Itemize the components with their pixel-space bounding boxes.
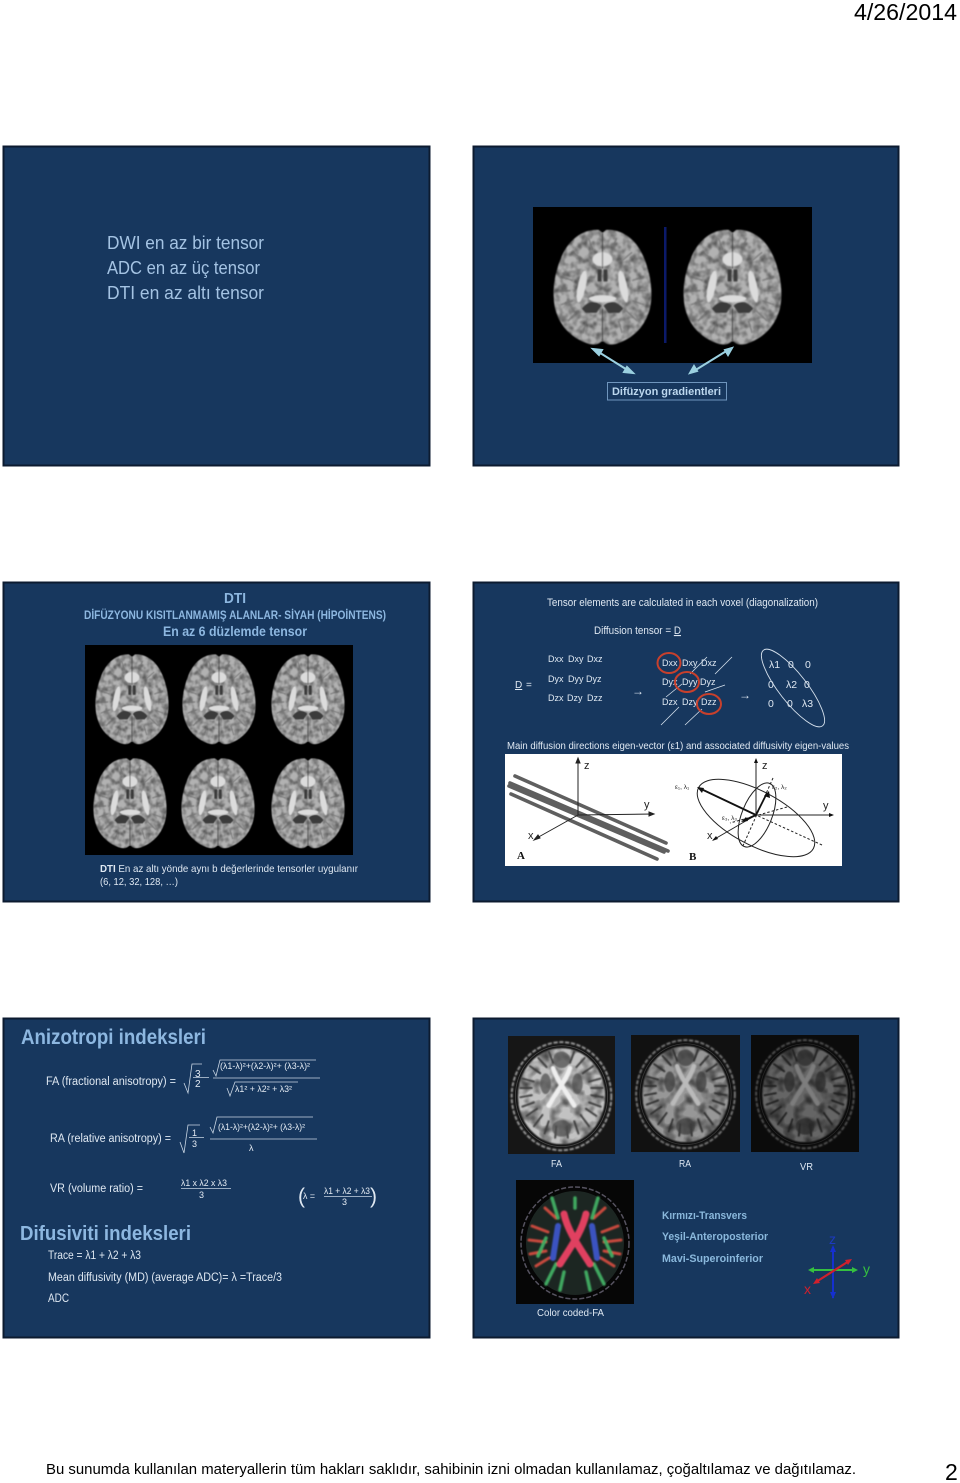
matrix: D: Dxy: [568, 654, 584, 664]
heading: diffusivity: Difusiviti indeksleri: [20, 1223, 191, 1245]
matrix: D: Dzy: [567, 693, 583, 703]
diagram B: ε₃, λ₃: [722, 815, 737, 822]
diagram B: B: [689, 851, 697, 863]
legend: direction colors: Kırmızı-Transvers: [662, 1210, 747, 1222]
caption: (6, 12, 32, 128, …): [100, 876, 178, 888]
legend: direction colors: Yeşil-Anteroposterior: [662, 1231, 769, 1243]
panel: slide 2 diffusion gradients: [474, 146, 898, 466]
formula: VR: 3: [199, 1190, 204, 1200]
caption: eigen vectors: Main diffusion directions eigen-vector (ε1) and associated diffusivity eigen-values: [507, 741, 849, 752]
label: diffusion gradients: Difüzyon gradientleri: [612, 386, 721, 398]
brain image grid: [85, 645, 353, 855]
formula: mean lambda: 3: [342, 1197, 347, 1207]
formula: FA: 2: [195, 1079, 201, 1090]
heading: DTI: [84, 590, 386, 639]
matrix: diagonal eigenvalues: [752, 642, 834, 734]
matrix: D: Dxx: [548, 654, 564, 664]
icon: axes: z: [829, 1231, 836, 1247]
icon: axes: [804, 1231, 870, 1299]
formula: RA: 3: [192, 1139, 197, 1149]
formula: VR: [50, 1178, 231, 1200]
formula: FA: 3: [195, 1069, 201, 1080]
diagram A: x: [528, 830, 534, 842]
text block: tensor counts: ADC en az üç tensor: [107, 258, 260, 278]
formula: VR: λ1 x λ2 x λ3: [181, 1178, 227, 1188]
matrix: D: Dxz: [587, 654, 603, 664]
matrix: diagonal eigenvalues: 0: [788, 659, 794, 671]
matrix: D: Dyy: [568, 674, 584, 684]
arrow: left gradient: [593, 349, 633, 373]
diagram A: [509, 758, 668, 862]
matrix: D: Dzz: [587, 693, 603, 703]
text block: diffusivity indices: [48, 1250, 282, 1305]
matrix: diagonal eigenvalues: λ1: [769, 659, 780, 671]
formula: mean lambda: λ =: [303, 1191, 315, 1201]
panel: slide 3 DTI: [4, 582, 430, 902]
diagram B: y: [823, 800, 829, 812]
text block: tensor counts: DWI en az bir tensor: [107, 233, 264, 253]
image: VR map: [751, 1035, 859, 1152]
matrix: D: Dyx: [548, 674, 564, 684]
map labels: [551, 1159, 813, 1173]
formula: mean lambda: (: [298, 1185, 305, 1208]
legend: direction colors: [662, 1210, 769, 1265]
matrix: crossed off-diagonal: Dxx: [662, 658, 678, 668]
matrix: diagonal eigenvalues: 0: [804, 679, 810, 691]
formula: FA: λ1² + λ2² + λ3²: [235, 1084, 292, 1094]
diagram A: y: [644, 799, 650, 811]
image: FA map: [508, 1036, 615, 1154]
matrix: crossed off-diagonal: Dzx: [662, 697, 678, 707]
diagram B: x: [707, 830, 713, 842]
matrix: D: [515, 654, 603, 703]
arrow: to diagonal matrix: →: [739, 688, 751, 702]
matrix: crossed off-diagonal: Dyy: [682, 677, 698, 687]
diagram B: ε₂, λ₂: [772, 784, 787, 791]
image: RA map: [631, 1035, 740, 1152]
matrix: crossed off-diagonal: Dzz: [701, 697, 717, 707]
map labels: VR: [800, 1162, 813, 1173]
formula: VR: VR (volume ratio) =: [50, 1183, 143, 1195]
formula: RA: λ: [249, 1143, 254, 1153]
diagram B: [675, 758, 834, 872]
panel: slide 4 tensor elements: [474, 582, 898, 902]
diagram A: z: [584, 760, 590, 772]
heading: DTI: DTI: [224, 590, 246, 607]
matrix: D: Dzx: [548, 693, 564, 703]
caption: [100, 863, 358, 888]
matrix: diagonal eigenvalues: 0: [768, 679, 774, 691]
matrix: D: Dyz: [586, 674, 602, 684]
formula: RA: 1: [192, 1128, 197, 1138]
heading: DTI: En az 6 düzlemde tensor: [163, 624, 308, 639]
footer note: Bu sunumda kullanılan materyallerin tüm hakları saklıdır, sahibinin izni olmadan kullanılamaz, çoğaltılamaz ve dağıtılamaz.: [46, 1461, 856, 1478]
matrix: crossed off-diagonal: Dxz: [701, 658, 717, 668]
brain images pair: [533, 207, 812, 363]
map labels: FA: [551, 1159, 562, 1170]
matrix: diagonal eigenvalues: λ3: [802, 698, 813, 710]
formula: FA: FA (fractional anisotropy) =: [46, 1076, 176, 1088]
label: color coded FA: Color coded-FA: [537, 1308, 604, 1319]
panel: slide 6 FA maps: [474, 1018, 898, 1338]
heading: DTI: DİFÜZYONU KISITLANMAMIŞ ALANLAR- SİYAH (HİPOİNTENS): [84, 607, 386, 622]
icon: axes: x: [804, 1281, 811, 1297]
heading text: Tensor elements are calculated in each voxel (diagonalization): [547, 597, 818, 609]
icon: axes: y: [863, 1261, 870, 1277]
formula: RA: [50, 1117, 317, 1153]
matrix: diagonal eigenvalues: 0: [768, 698, 774, 710]
text block: tensor counts: DTI en az altı tensor: [107, 283, 264, 303]
caption: DTI En az altı yönde aynı b değerlerinde tensorler uygulanır: [100, 863, 358, 875]
panel: slide 1 tensor counts: [4, 146, 430, 466]
formula: FA: [46, 1060, 320, 1096]
text block: diffusivity indices: Trace = λ1 + λ2 + λ3: [48, 1250, 141, 1262]
arrow: right gradient: [690, 348, 732, 373]
diagram B: ε₁, λ₁: [675, 784, 690, 791]
formula: RA: RA (relative anisotropy) =: [50, 1133, 171, 1145]
matrix: crossed off-diagonal: Dyz: [700, 677, 716, 687]
matrix: diagonal eigenvalues: 0: [787, 698, 793, 710]
matrix: crossed off-diagonal: Dyx: [662, 677, 678, 687]
diagram B: z: [762, 760, 768, 772]
label: diffusion gradients: [608, 382, 726, 400]
diagram: fibers and ellipsoid: [505, 754, 842, 872]
formula: RA: (λ1-λ)²+(λ2-λ)²+ (λ3-λ)²: [218, 1122, 305, 1132]
text block: diffusivity indices: ADC: [48, 1293, 69, 1305]
legend: direction colors: Mavi-Superoinferior: [662, 1253, 764, 1265]
formula: mean lambda: [298, 1185, 377, 1208]
matrix: D: D: [515, 680, 522, 691]
image: color coded FA: [516, 1180, 634, 1304]
matrix: crossed off-diagonal: Dxy: [682, 658, 698, 668]
text block: tensor counts: [107, 233, 264, 303]
panel: slide 5 indices: [4, 1018, 430, 1338]
matrix: crossed off-diagonal: Dzy: [682, 697, 698, 707]
formula: mean lambda: ): [370, 1185, 377, 1208]
matrix: crossed off-diagonal: [658, 653, 732, 725]
matrix: diagonal eigenvalues: 0: [805, 659, 811, 671]
heading text: [547, 597, 818, 637]
arrow: to off-diagonal matrix: →: [632, 684, 644, 698]
diagram A: A: [517, 850, 525, 862]
matrix: D: =: [526, 680, 532, 691]
formula: FA: (λ1-λ)²+(λ2-λ)²+ (λ3-λ)²: [220, 1061, 310, 1071]
heading text: Diffusion tensor = D: [594, 625, 681, 637]
formula: mean lambda: λ1 + λ2 + λ3: [324, 1186, 370, 1196]
text block: diffusivity indices: Mean diffusivity (MD) (average ADC)= λ =Trace/3: [48, 1272, 282, 1284]
map labels: RA: [679, 1159, 691, 1170]
heading: anisotropy: Anizotropi indeksleri: [21, 1026, 206, 1049]
matrix: diagonal eigenvalues: λ2: [786, 679, 797, 691]
